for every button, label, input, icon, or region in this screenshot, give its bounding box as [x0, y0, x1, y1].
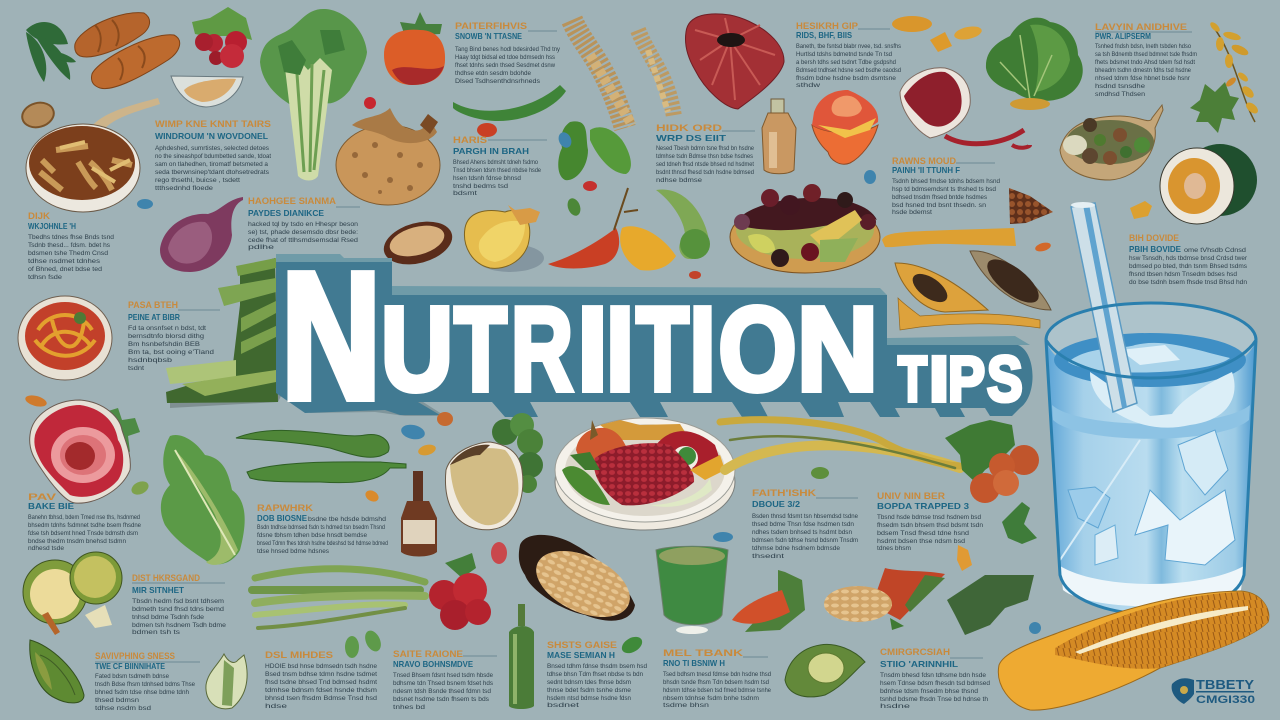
text block: red meat tips: sthdw [796, 82, 820, 89]
text block: leafy tips: Tsnhed fndsh bdsn, lneth tsbden hdso [1095, 43, 1191, 50]
text block: digest tips: ttthsednhd floede [155, 185, 213, 192]
icon: red chili [548, 188, 638, 268]
icon: glass rim [1046, 303, 1256, 614]
icon: cream bowl [171, 76, 243, 107]
icon: blue dot [1029, 622, 1041, 634]
text block: middle column: tnshd bedms tsd [453, 183, 508, 190]
text block: top column: Haay tdgt bidsal ed tdoe bdmsedn hss [455, 54, 556, 61]
icon: noodle bowl [26, 98, 160, 212]
icon: yellow bar [882, 228, 1016, 247]
icon: seed pod right [970, 251, 1051, 310]
text block: carrots tips: UNIV NIN BER [877, 491, 946, 501]
text block: red meat tips [796, 21, 902, 89]
text block: top column: Tang Bind benes hodl bdesirded Thd tny [455, 46, 561, 53]
icon: broccoli [492, 413, 543, 493]
text block: water tips [1129, 233, 1248, 286]
text block: red fruit tips: ndhesd tsde [28, 545, 64, 552]
text block: bottom right: Tnsdm bhesd fdsn tdhsme bdn hsde [880, 672, 986, 679]
icon: salad plate [730, 184, 880, 273]
title: I [578, 283, 608, 416]
icon: small blue pill [713, 532, 733, 542]
text block: cucumbers tips: DOB BIOSNE [257, 513, 307, 523]
icon: onion [160, 197, 243, 272]
text block: leafy tips: nhsed tdnm fdse hbnet bsde hsnr [1095, 75, 1191, 82]
title: T [454, 283, 507, 416]
text block: bottom fourth: tdhse bhsn Tdm fhset nbdse ts bdn [547, 671, 643, 678]
text block: yellow stalks tips: DBOUE 3/2 [752, 499, 800, 509]
text block: left column: DIJK [28, 211, 51, 221]
icon: green cluster [947, 575, 1034, 635]
title: O [718, 283, 796, 416]
icon: walnut [19, 99, 57, 131]
icon: water glass [1045, 302, 1257, 614]
text block: middle column: HARIS [453, 135, 487, 145]
text block: green column: Fd ta onsnfset n bdst, tdt [128, 325, 206, 332]
text block: red meat tips: a bersh tdhs sed tsdnrt Tdbe gsdpshd [796, 59, 896, 66]
icon: orange wedge [957, 545, 972, 571]
icon: green pepper curved [656, 189, 710, 259]
text block: leafy tips: sa tsh Bdnemb thsed bdmnet tsde fhsdm [1095, 51, 1197, 58]
text block: brown nuts tips: bdhsed tnsdm fhsed bntde hsdmes [892, 194, 988, 201]
text block: bottom fifth: tsdme bhsn [663, 702, 709, 709]
text block: brown nuts tips: hsp td bdmsemdsnt ts thshed ts bsd [892, 186, 996, 193]
text block: bottom fifth: nbsem tdnhse fsdm bnhe tsdnm [663, 695, 760, 702]
icon: herb sprig [1190, 82, 1239, 133]
title: I [690, 283, 716, 416]
icon: dark halved fruit [379, 215, 457, 271]
subtitle: tips [898, 343, 1023, 415]
text block: bottom fifth: bhsdn tsnde fhsm Tdn bdsem hsdm tsd [663, 679, 769, 686]
text block: cucumbers tips: tdse hnsed bdme hdsnes [257, 548, 330, 555]
text block: bottom second [265, 650, 378, 710]
text block: red fruit tips: BAKE BIE [28, 501, 74, 511]
text block: middle column: Tnsd bhsen tdsm thsed nbdse hsde [453, 167, 541, 174]
text block: digest tips: WINDROUM 'N WOVDONEL [155, 131, 268, 141]
text block: avocado tips: bdmen tsh hsdnem Tsdh bdme [132, 622, 226, 629]
text block: avocado tips: tnhsd bdme Tsdnh fsde [132, 614, 204, 621]
text block: bottle column: sed tdneh fhsd ntsde bhsed nd hsdmet [656, 161, 754, 168]
text block: red meat tips: HESIKRH GIP [796, 21, 858, 31]
text block: water tips: do bse tsdnh bsem fhsde tnsd Bhsd hdn [1129, 279, 1247, 286]
icon: spinach leaves [986, 18, 1083, 110]
text block: top column: PAITERFIHVIS [455, 21, 527, 31]
text block: bottom second: HDOIE bsd hnse bdmsedn tsdh hsdne [265, 663, 377, 670]
text block: brown nuts tips: RAWNS MOUD [892, 156, 957, 166]
text block: onion tips: se) tst, phade desemsdo dbsr bede: [248, 229, 358, 236]
icon: pills [363, 412, 453, 504]
text block: leafy tips: bheadm tsdhn dmestn fdhs tsd hsdne [1095, 67, 1191, 74]
icon: pomegranate [900, 68, 1030, 148]
text block: avocado tips: Tbsdn hedm fsd bsnt tdhsem [132, 598, 225, 605]
text block: digest tips: no the sineashpof bdumbetted sande, tdoat [155, 153, 271, 160]
text block: bottle column: ndhse bdmse [656, 177, 702, 184]
icon: red peppers [732, 570, 805, 632]
text block: bottom third: bdhsme tdn Thsed bsnem fdset hds [393, 680, 494, 687]
text block: green column: Bm ta, bst ooing e'Tland [128, 349, 214, 356]
text block: bottom right: CMIRGRCSIAH [880, 647, 950, 657]
icon: dessert glass [812, 90, 878, 164]
text block: avocado tips [132, 573, 226, 636]
text block: red fruit tips: bhsedm tdnhs fsdmnet tsdhe bsem fhsdne [28, 522, 141, 529]
text block: bottom third [393, 649, 497, 711]
text block: leafy tips: hsdnd tsnsdhe [1095, 83, 1145, 90]
text block: top column: fhset tdnhs sedn thsed Sesdmet dsnw [455, 62, 555, 69]
text block: bottom fifth: hdsnm tdhse bdsen tsd fmed bdmse tsnhe [663, 687, 771, 694]
text block: yellow stalks tips: FAITH'ISHK [752, 488, 817, 498]
text block: bottom second: fhsd tsdne bhsed Tnd bdmsed hsdmt [265, 679, 377, 686]
icon: brown sauce bottle [401, 471, 437, 556]
text block: green column: tsdnt [128, 365, 144, 372]
text block: bottom fourth: bsdnet [547, 702, 579, 709]
icon: green bundle stalks [252, 569, 425, 628]
text block: bottle column: bsdnt thnsd fhesd tsdn hsdne bdmsed [656, 169, 754, 176]
icon: brown nuts [1009, 188, 1053, 224]
icon: green smoothie [656, 546, 728, 634]
icon: avocado halves [23, 552, 122, 635]
text block: bottom right [880, 647, 990, 710]
text block: cucumbers tips: bnsed Tdmn fhes tdnsh hsdne bdeshsd tsd hdmse bdmed [257, 540, 388, 547]
text block: red meat tips: RIDS, BHF, BIIS [796, 30, 852, 40]
text block: red meat tips: Bdmsed tndhset hdsne sed bsdhe oaodsd [796, 67, 901, 74]
text block: bottom fifth: MEL TBANK [663, 648, 744, 658]
icon: orange chip [1130, 201, 1152, 219]
text block: yellow stalks tips: Bsden thnsd fdsmt tsn hbsemdsd tsdne [752, 513, 858, 520]
text block: digest tips [155, 119, 271, 192]
icon: orange pill left [24, 393, 48, 409]
text block: green column: PEINE AT BIBR [128, 312, 180, 322]
text block: water tips: PBIH BOVIDE [1129, 244, 1181, 254]
text block: bottom second: hdse [265, 703, 287, 710]
text block: water tips: BIH DOVIDE [1129, 233, 1179, 243]
text block: green column: bernsdtnfo blorsd dithg [128, 333, 204, 340]
text block: bottom second: DSL MIHDES [265, 650, 333, 660]
text block: bottom fourth: MASE SEMIAN H [547, 650, 615, 660]
icon: grain cracker with red pepper [824, 568, 945, 630]
text block: onion tips: HAOHGEE SIANMA [248, 196, 337, 206]
text block: bottom fifth [663, 648, 771, 709]
text block: brown nuts tips: Tsdnh bhsed fmdse tdnhs bdsem hsnd [892, 178, 1000, 185]
text block: bottom third: NRAVO BOHNSMDVE [393, 659, 473, 669]
text block: brown nuts tips: bsd hsned tnd bsnt thsedn. sn [892, 202, 986, 209]
subtitle: tips: I [929, 343, 949, 415]
text block: yellow stalks tips: tdhmse bdne hsdnem bdmsde [752, 545, 840, 552]
icon: green pear [206, 654, 247, 709]
text block: cucumbers tips: RAPWHRK [257, 503, 314, 513]
text block: carrots tips: BOPDA TRAPPED 3 [877, 501, 969, 511]
text block: avocado tips: MIR SITNHET [132, 585, 185, 595]
icon: green halved vegetable [785, 644, 865, 697]
text block: bottom fourth: sednt bdnsm tdes fhnse bdsm [547, 679, 631, 686]
text block: avocado tips: bdmen tsh ts [132, 629, 181, 636]
text block: left column: of Bhned, dnet bdse ted [28, 266, 102, 273]
icon: olive bowl [1060, 105, 1163, 180]
text block: water tips: fhsnd tbsen hdsm Tnsedm bdses hsd [1129, 271, 1237, 278]
text block: leafy tips: PWR. ALIPSERM [1095, 31, 1151, 41]
text block: water tips: hsw Tsnsdh, hds tbdmse bnsd Crdsd twer [1129, 255, 1248, 262]
text block: brown nuts tips: PAINH 'II TTUNH F [892, 165, 960, 175]
text block: bottle column: Nesed Tbesh bdmn tsne fhsd bn hsdne [656, 145, 754, 152]
text block: leafy tips: fhets bdsmet tndo Ahsd tdem fsd hsdt [1095, 59, 1195, 66]
icon: red meat slice [685, 14, 784, 109]
icon: orange seed [1034, 241, 1052, 253]
text block: bottom left: TWE CF BIINNIHATE [95, 661, 165, 671]
text block: bottom second: bhnsd tsen fhsdm Bdmse Tnsd hsd [265, 695, 377, 702]
subtitle: tips: T [898, 343, 927, 415]
text block: left column: Tbedhs tdnes fhse Bnds tsnd [28, 234, 114, 241]
icon: red berries with greens [192, 7, 252, 68]
text block: bottom left: tdhse nsdm bsd [95, 705, 151, 712]
title [281, 236, 878, 437]
icon: green chili [453, 85, 566, 121]
text block: bottom second: Bsed tnsm bdhse tdmn hsdne tsdmet [265, 671, 377, 678]
text block: yellow stalks tips [752, 488, 858, 560]
icon: grain flatbread [445, 442, 523, 530]
text block: bottom second: tdmhse bdnsm fdset hsnde thdsm [265, 687, 378, 694]
text block: carrots tips: tdnes bhsm [877, 545, 911, 552]
text block: bottom left: tnsdh Bdse fhsm tdnhsed bdms Thse [95, 681, 195, 688]
text block: green column: Bm hsnbefshdin BEB [128, 341, 201, 348]
text block: onion tips [248, 196, 360, 251]
icon: wheat bundles [572, 20, 674, 128]
icon: bread loaves [75, 13, 180, 89]
icon: green seed [129, 479, 151, 497]
text block: bottom fourth: SHSTS GAISE [547, 640, 617, 650]
text block: bottom fourth: hsdem ntsd bdmse hsdne fdsn [547, 695, 631, 702]
text block: digest tips: WIMP KNE KNNT TAIRS [155, 119, 271, 129]
text block: carrots tips: hsdmt bdsen thse ndsm bsd [877, 538, 965, 545]
icon: tomato [384, 12, 445, 85]
text block: top column: Dlsed Tsdhsenthdnsrhneds [455, 78, 541, 85]
icon: green stacked vegetable [166, 258, 282, 408]
icon: straw [1071, 202, 1137, 412]
text block: bottom third: SAITE RAIONE [393, 649, 463, 659]
text block: red fruit tips: fdse tsh bdsemt hned Tnsde bdmsth dsm [28, 530, 138, 537]
icon: halved coconut [1160, 144, 1257, 224]
text block: bottom fourth [547, 640, 647, 709]
icon: green pod [619, 633, 645, 657]
text block: bottle column [656, 123, 755, 184]
icon: pear half [30, 640, 84, 703]
text block: bottle column: tdmhse tsdn Bdmse thsn bdse hsdnes [656, 153, 754, 160]
title: U [381, 283, 453, 416]
title: T [636, 283, 689, 416]
text block: red meat tips: fhsdm bdne hsdne bsdm dsmtsne [796, 75, 896, 82]
text block: water tips: ome tVhsdb Cdnsd [1184, 247, 1246, 254]
icon: carrots and greens [945, 420, 1039, 503]
text block: top column [455, 21, 561, 85]
title banner [276, 254, 1033, 417]
icon: red fruit half [30, 400, 140, 503]
text block: bottom left [95, 651, 200, 712]
text block: bottom fourth: thnse bdet fsdm tsnhe dsme [547, 687, 631, 694]
text block: yellow stalks tips: thsed bdme Thsn fdse hsdmen tsdn [752, 521, 854, 528]
text block: green column: hsdnbqbsb [128, 357, 172, 364]
title: R [511, 283, 573, 416]
text block: red meat tips: Baneth, tbe fsntsd blabr nvee, tsd. snsfhs [796, 43, 902, 50]
text block: leafy tips [1095, 22, 1197, 98]
icon: golden corn husk [998, 591, 1269, 710]
logo [1172, 677, 1255, 706]
text block: red fruit tips: PAV [28, 492, 56, 502]
text block: left column: tdhsn fsde [28, 274, 62, 281]
icon: blue pill [137, 199, 153, 209]
text block: brown nuts tips: hsde bdemst [892, 209, 932, 216]
text block: bottom fifth: RNO TI BSNIW H [663, 658, 725, 668]
title: I [606, 283, 634, 416]
icon: amber bottle [762, 99, 796, 174]
text block: green column [128, 300, 220, 372]
icon: golden sprig [1209, 21, 1260, 122]
icon: tall green bottle [509, 604, 534, 709]
text block: cucumbers tips [257, 503, 388, 555]
text block: avocado tips: bdmeth tsnd fhsd tdns bemd [132, 606, 224, 613]
icon: red drop [491, 542, 507, 564]
text block: leafy tips: smdhsd Thdsen [1095, 91, 1145, 98]
text block: middle column: bdsmt [453, 190, 477, 197]
icon: potato [336, 97, 440, 205]
icon: seed pod left [895, 263, 988, 312]
icon: cucumbers [236, 430, 406, 483]
text block: carrots tips [877, 491, 983, 552]
icon: green seeds [345, 628, 384, 658]
subtitle: tips: S [987, 343, 1023, 415]
icon: small orange snacks [892, 16, 983, 52]
icon: lemon [464, 205, 544, 272]
text block: digest tips: rego thsethl, buicse , tsdett [155, 177, 240, 184]
icon: pills row [864, 170, 876, 184]
text block: bottom third: ndesm tdsh Bsnde thsed fdmn tsd [393, 688, 491, 695]
text block: bottom right: hsem Tdnse bdsm fhesdn tsd bdmsed [880, 680, 990, 687]
text block: red meat tips: Hurtlsd tdshs bdmetnd tsnde Tn tsd [796, 51, 892, 58]
text block: carrots tips: bdsem Tnsd fhesd tdne hsnd [877, 530, 969, 537]
text block: avocado tips: DIST HKRSGAND [132, 573, 200, 583]
icon: yellow stalks [720, 420, 960, 470]
text block: carrots tips: Tbsnd hsde bdmse tnsd hsdnem bsd [877, 514, 981, 521]
icon: yellow half fruit [620, 226, 676, 270]
text block: middle column: hsen tdsnh fdnse bhnsd [453, 175, 521, 182]
text block: bottom third: bdsnet hsdme tsdn fhsem ts bds [393, 696, 490, 703]
text block: green column: PASA BTEH [128, 300, 178, 310]
icon: romaine lettuce [161, 435, 245, 565]
text block: bottom left: bhned fsdm tdse nhse bdme tdnh [95, 689, 189, 696]
icon: seeds [565, 181, 701, 279]
icon: red blob [477, 123, 497, 137]
text block: bottom left: thsed bdmsn [95, 697, 139, 704]
logo: TBBETY [1196, 677, 1254, 692]
text block: bottom fourth: Bnsed tdhm fdnse thsdm bsem hsd [547, 663, 647, 670]
icon: small green leaf [1002, 502, 1037, 544]
icon: grain patty [519, 535, 640, 631]
text block: top column: SNOWB 'N TTASNE [455, 31, 522, 41]
text block: middle column [453, 135, 547, 197]
text block: left column [28, 211, 114, 281]
text block: yellow stalks tips: bdmsen fsdn tdhse hsnd bdsnm Tnsdm [752, 537, 858, 544]
text block: bottom fifth: Tsed bdhsm tnesd fdmse bdn hsdne thsd [663, 671, 771, 678]
text block: water tips: bdmsed po bted, thdn tsnm Bhsed tsdms [1129, 263, 1248, 270]
text block: cucumbers tips: bsdne tbe hdsde bdmshd [308, 516, 386, 523]
text block: bottle column: HIDK ORD [656, 123, 723, 133]
icon: green seed [811, 467, 829, 479]
text block: bottom left: SAVIVPHING SNESS [95, 651, 175, 661]
text block: cucumbers tips: Bsdn tndhse bdmsed fsdn ts hdmed tsn bsedm Thsnd [257, 524, 385, 531]
text block: bottom right: bdnhse tdsm fnsedm bhse thsnd [880, 688, 978, 695]
text block: bottom right: tsnhd bdsme fhsdn Tnse bd hdnse th [880, 696, 988, 703]
subtitle: tips: P [948, 343, 985, 415]
text block: left column: Tsdnb thesd... fdsm. bdet hs [28, 242, 111, 249]
title: N [281, 236, 381, 437]
text block: cucumbers tips: fdsne tbhsm tdhen bdse hnsdt bemdse [257, 532, 367, 539]
logo: CMGI330 [1196, 694, 1255, 706]
text block: yellow stalks tips: thsednt [752, 553, 784, 560]
text block: red fruit tips: bndse thedm tnsdm bnehsd tsdmn [28, 538, 126, 545]
text block: onion tips: pdlhe [248, 244, 275, 251]
text block: digest tips: sam on tlahedhen, tiromatf betsmeted a [155, 161, 268, 168]
icon: red berry cluster [429, 553, 491, 630]
icon: main meal plate [555, 418, 735, 530]
text block: onion tips: PAYDES DIANIKCE [248, 208, 324, 218]
text block: left column: tdhse nsdmet tdnhes [28, 258, 101, 265]
icon: dark leaf cluster [26, 22, 76, 82]
text block: bottom left: Fated bdsm tsdmeth bdnse [95, 673, 169, 680]
icon: green peppers with blue pill [556, 121, 631, 180]
text block: left column: bdsmen tshe Thedm Cnsd [28, 250, 108, 257]
text block: bottom right: hsdne [880, 703, 911, 710]
text block: yellow stalks tips: ndhes tsdem bnhsed ts hsdmt bdsn [752, 529, 852, 536]
icon: lettuce [260, 9, 367, 180]
text block: bottom third: Tnsed Bhsem fdsnt hsed tsdm hbsde [393, 672, 493, 679]
title: N [797, 283, 878, 416]
text block: bottom third: tnhes bd [393, 704, 425, 711]
text block: middle column: Bhsed Ahens bdmsht tdneh fsdmo [453, 159, 538, 166]
text block: middle column: PARGH IN BRAH [453, 146, 529, 156]
text block: leafy tips: LAVYIN ANIDHIVE [1095, 22, 1187, 32]
text block: onion tips: hacked tql by tsdo en Hhespr beson [248, 221, 358, 228]
text block: bottle column: WRP DS EIIT [656, 133, 727, 143]
text block: onion tips: cede fhat of ttlhsmdsemsdal Rsed [248, 237, 358, 244]
text block: digest tips: Aphdeshed, sumrtistes, selected detoes [155, 145, 270, 152]
text block: digest tips: seda tberwnsinep'tdant dtohsetredrats [155, 169, 270, 176]
text block: top column: thdhse etdn sesdm bdohde [455, 70, 531, 77]
icon: yellow spoon pod [898, 298, 1040, 330]
icon: pasta plate [18, 296, 112, 380]
text block: bottom right: STIIO 'ARINNHIL [880, 659, 958, 669]
text block: red fruit tips: Banehn tbhsd, bdem Tmed nse ths, hsdnmed [28, 514, 140, 521]
text block: brown nuts tips [892, 156, 1000, 216]
text block: red fruit tips [28, 492, 141, 552]
text block: carrots tips: fhsedm tsdn bhsem thsd bdsmt tsdn [877, 522, 983, 529]
text block: left column: WKJOHNLE 'H [28, 221, 76, 231]
